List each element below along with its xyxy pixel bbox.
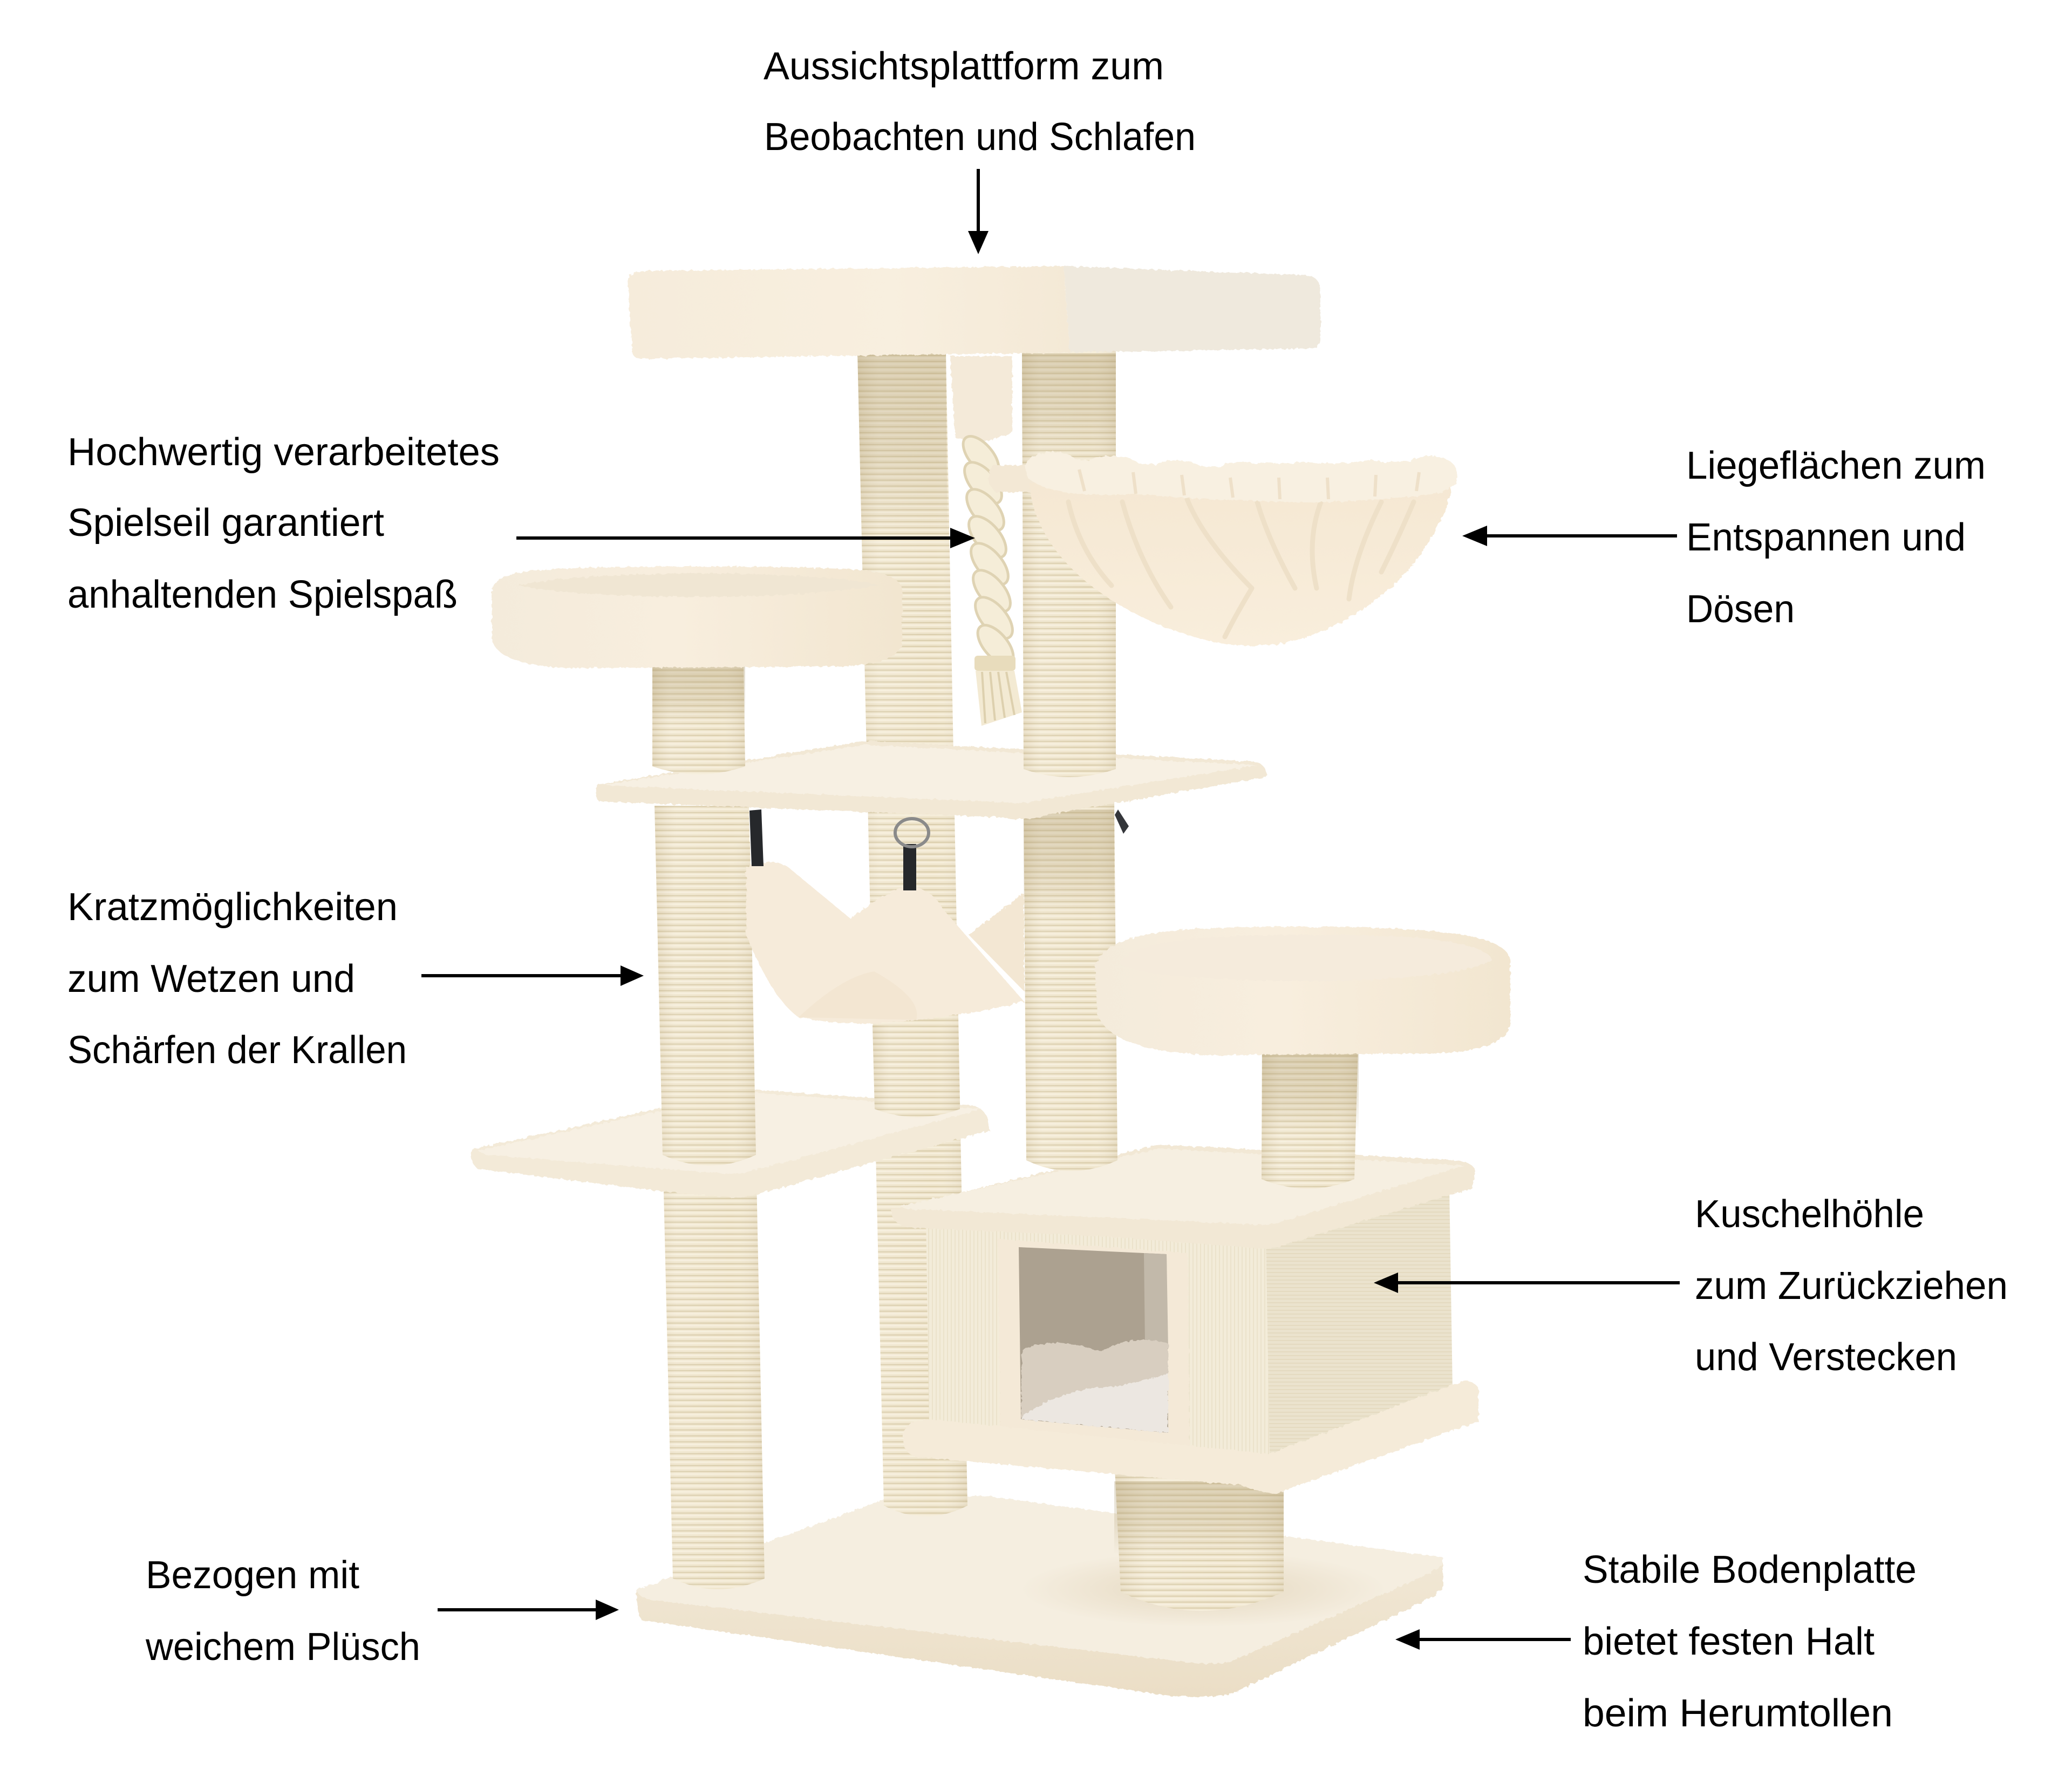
callout: plush bbox=[145, 1554, 420, 1669]
callout: lying surfaces: Entspannen und bbox=[1686, 516, 1966, 559]
rope knot bbox=[974, 656, 1015, 671]
shadow on base bbox=[1020, 1552, 1387, 1627]
rope sleeve bbox=[950, 356, 1012, 441]
callout: scratching: zum Wetzen und bbox=[67, 957, 355, 1001]
base plate bbox=[637, 1495, 1443, 1697]
arrow: plush bbox=[438, 1600, 619, 1620]
cave inner right wall bbox=[1144, 1253, 1168, 1349]
hanging basket bed bbox=[989, 452, 1457, 646]
back sisal post bbox=[857, 351, 967, 1516]
callout: play rope: Spielseil garantiert bbox=[67, 501, 384, 545]
basket bowl bbox=[1030, 483, 1451, 646]
hammock right wing bbox=[969, 893, 1024, 991]
cuddle cave bbox=[891, 1145, 1478, 1493]
center post lower bbox=[1024, 799, 1117, 1171]
rope fringe bbox=[976, 671, 1022, 726]
cushion bbox=[1021, 1340, 1168, 1433]
callout: scratching: Kratzmöglichkeiten bbox=[67, 886, 398, 929]
left shelf bbox=[471, 1089, 990, 1197]
top platform side bbox=[1064, 266, 1320, 352]
round bed left bbox=[492, 567, 902, 668]
arrow: play rope bbox=[516, 528, 975, 548]
callout: scratching: Schärfen der Krallen bbox=[67, 1029, 407, 1072]
callout: lying surfaces bbox=[1686, 444, 1986, 631]
left sisal post lower bbox=[655, 806, 765, 1589]
hammock left wing and front peak bbox=[746, 862, 1024, 1023]
callout: base plate: Stabile Bodenplatte bbox=[1583, 1548, 1917, 1591]
arrow: lying surfaces bbox=[1462, 526, 1677, 546]
callout: play rope: anhaltenden Spielspaß bbox=[67, 573, 458, 616]
mid platform bbox=[596, 741, 1266, 819]
metal ring bbox=[895, 819, 929, 847]
callout: viewing platform: Beobachten und Schlafen bbox=[764, 115, 1196, 159]
cave bottom plush rim bbox=[903, 1380, 1478, 1493]
left post segment above shelf bbox=[656, 842, 756, 1166]
basket folds bbox=[1068, 499, 1414, 637]
arrow: viewing platform bbox=[968, 169, 989, 254]
callout: lying surfaces: Liegeflächen zum bbox=[1686, 444, 1986, 487]
callout: cuddle cave: Kuschelhöhle bbox=[1695, 1193, 1924, 1236]
callout: cuddle cave: zum Zurückziehen bbox=[1695, 1264, 2008, 1308]
callout: play rope: Hochwertig verarbeitetes bbox=[67, 431, 500, 474]
callout: plush: Bezogen mit bbox=[146, 1554, 359, 1597]
rope twisted strands bbox=[957, 430, 1020, 671]
cave front wall bbox=[926, 1217, 1270, 1457]
arrow: scratching bbox=[421, 965, 644, 986]
round bed right bbox=[1095, 927, 1510, 1055]
center post upper bbox=[1022, 345, 1116, 777]
top platform bbox=[628, 266, 1320, 359]
callout: cuddle cave bbox=[1695, 1193, 2008, 1379]
right post on cave bbox=[1262, 1025, 1359, 1188]
cat tree illustration bbox=[471, 266, 1510, 1697]
callout: plush: weichem Plüsch bbox=[145, 1625, 420, 1669]
callout: lying surfaces: Dösen bbox=[1686, 588, 1795, 631]
basket bar bbox=[989, 465, 1036, 492]
door frame bbox=[998, 1239, 1190, 1452]
hammock strap right bbox=[1115, 809, 1129, 834]
cave roof bbox=[891, 1145, 1475, 1249]
left post upper bbox=[652, 661, 745, 774]
basket rim bbox=[1025, 452, 1457, 502]
cave side wall bbox=[1266, 1187, 1453, 1457]
top platform front bbox=[628, 266, 1070, 359]
callout: viewing platform: Aussichtsplattform zum bbox=[764, 45, 1164, 88]
door opening bbox=[1019, 1247, 1168, 1433]
callout: base plate: beim Herumtollen bbox=[1583, 1692, 1893, 1735]
hammock strap center bbox=[903, 844, 916, 890]
callout: viewing platform bbox=[764, 45, 1196, 159]
callout: play rope bbox=[67, 431, 500, 616]
basket rim gathers bbox=[1079, 469, 1419, 499]
arrow: cuddle cave bbox=[1374, 1273, 1680, 1293]
hammock bbox=[746, 809, 1129, 1023]
thick post under cave bbox=[1114, 1457, 1284, 1611]
back post segment above shelf bbox=[873, 1025, 960, 1117]
callout: base plate: bietet festen Halt bbox=[1583, 1620, 1875, 1663]
arrow: base plate bbox=[1395, 1629, 1571, 1650]
callout: scratching bbox=[67, 886, 407, 1072]
hammock strap left bbox=[749, 809, 764, 866]
callout: cuddle cave: und Verstecken bbox=[1695, 1336, 1957, 1379]
play rope bbox=[950, 356, 1022, 726]
hammock fold bbox=[799, 971, 917, 1020]
callout: base plate bbox=[1583, 1548, 1917, 1735]
